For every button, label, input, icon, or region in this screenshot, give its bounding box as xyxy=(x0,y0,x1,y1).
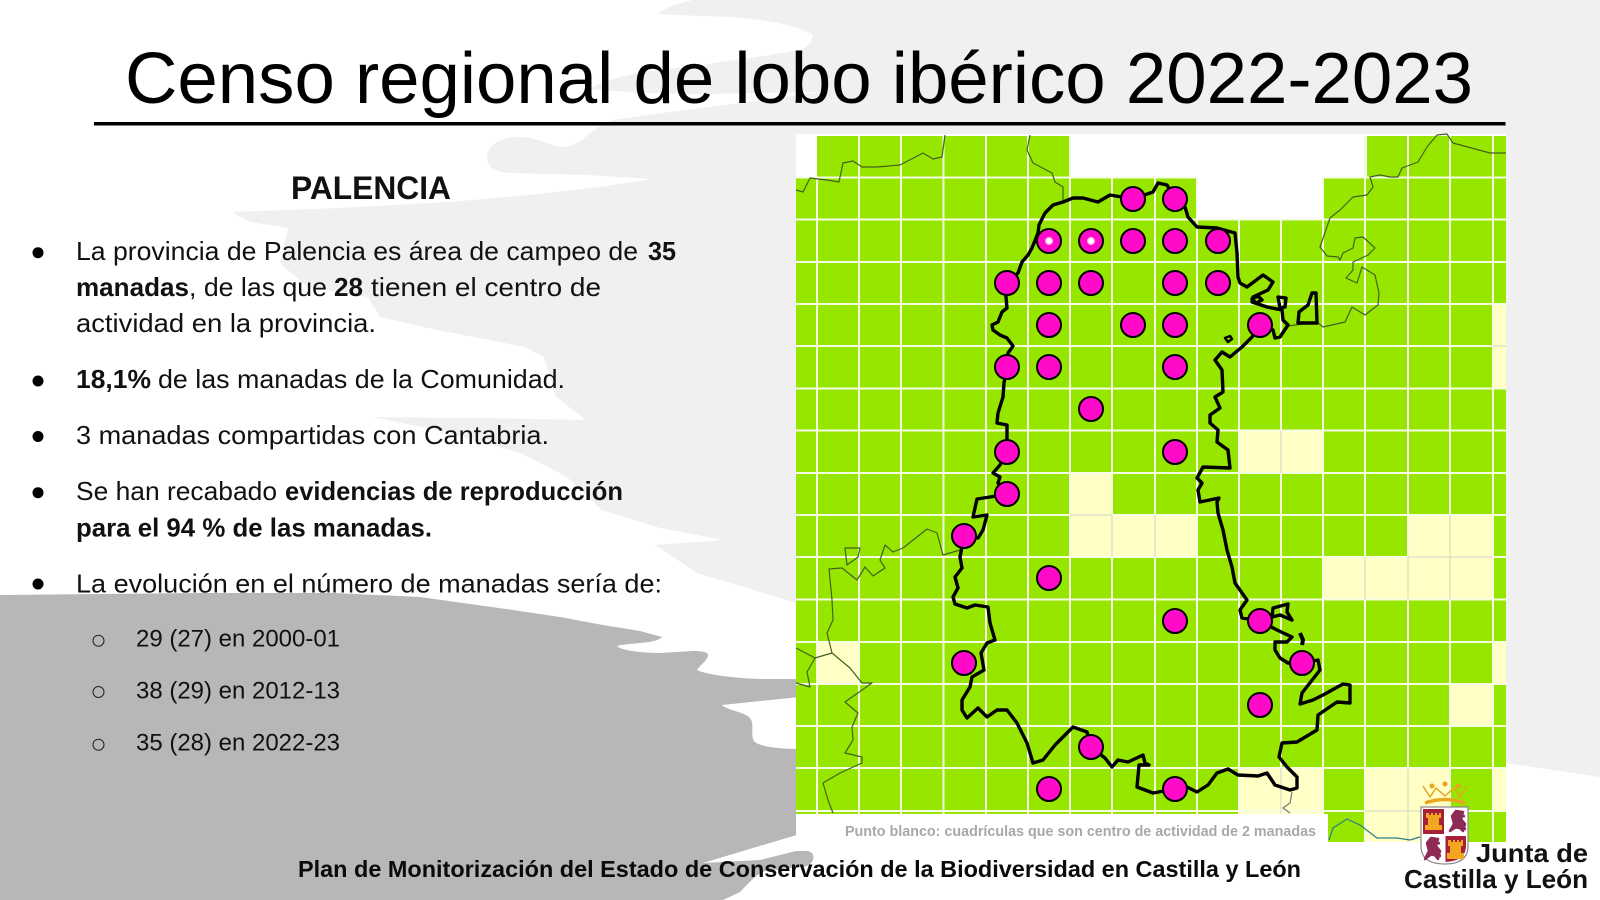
bullet: territory: 35 xyxy=(648,236,676,266)
title: Censo regional de lobo ibérico 2022-2023 xyxy=(125,39,1473,119)
sub-bullet: 2012-13: 38 (29) en 2012-13 xyxy=(136,678,340,704)
logo: Junta de Castilla y León xyxy=(1404,782,1588,894)
bullet: territory: actividad en la provincia. xyxy=(76,308,376,338)
title underline xyxy=(94,122,1506,126)
bullet: reproduction evidence: Se han recabado xyxy=(76,476,277,506)
logo: Junta de Castilla y León: Castilla y León xyxy=(1404,864,1588,894)
background: light gray brush shape xyxy=(232,0,1600,777)
map panel xyxy=(796,134,1506,842)
white dots: cells with two packs xyxy=(1046,238,1094,244)
bullet: territory: manadas xyxy=(76,272,189,302)
Palencia province outline xyxy=(953,183,1350,793)
map note panel: Punto blanco: cuadrículas que son centro de actividad de 2 manadas xyxy=(845,824,1316,840)
bullet: evolution: La evolución en el número de manadas sería de: xyxy=(76,569,662,599)
bullet: territory xyxy=(32,236,676,338)
background: dark gray brush shape xyxy=(0,593,813,900)
bullet: reproduction evidence: para el 94 % de las manadas. xyxy=(76,512,432,542)
bullet: shared packs: 3 manadas compartidas con Cantabria. xyxy=(76,420,549,450)
bullet: share of the region: de las manadas de la Comunidad. xyxy=(158,364,565,394)
pack markers xyxy=(952,187,1314,801)
bullet: reproduction evidence xyxy=(32,476,623,542)
bullet list xyxy=(32,236,676,757)
map base xyxy=(796,134,1506,842)
pale yellow cells xyxy=(817,304,1506,842)
bullet: share of the region: 18,1% xyxy=(76,364,151,394)
sub-bullet: 2022-23: 35 (28) en 2022-23 xyxy=(136,730,340,757)
footer text: Plan de Monitorización del Estado de Conservación de la Biodiversidad en Castilla y León xyxy=(298,856,1301,882)
sub-bullet: 2000-01: 29 (27) en 2000-01 xyxy=(136,626,340,653)
bullet: reproduction evidence: evidencias de reproducción xyxy=(285,476,623,506)
province heading: PALENCIA xyxy=(291,170,451,206)
river line xyxy=(1329,819,1420,840)
green presence cells xyxy=(796,136,1506,842)
bullet: territory: , de las que xyxy=(189,272,327,302)
icon: coat of arms shield xyxy=(1421,807,1468,864)
logo text: Junta de xyxy=(1476,838,1588,868)
grid lines xyxy=(796,136,1506,842)
faint lines between yellow cells xyxy=(1070,346,1506,842)
bullet: territory: La provincia de Palencia es área de campeo de xyxy=(76,236,638,266)
icon: crown xyxy=(1423,782,1467,803)
map note panel xyxy=(796,814,1328,844)
bullet: territory: 28 xyxy=(334,272,363,302)
neighbouring province boundaries xyxy=(796,134,1506,813)
bullet: territory: tienen el centro de xyxy=(371,272,601,302)
